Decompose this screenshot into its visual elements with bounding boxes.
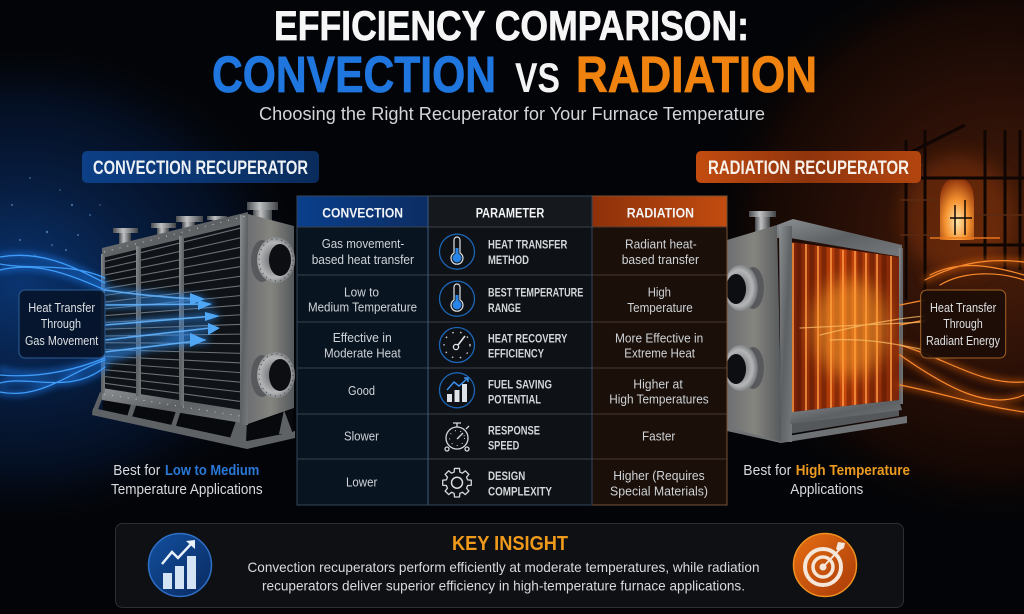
upper flange: [251, 237, 295, 283]
row: heat transfer method: [312, 236, 700, 267]
callout: heat transfer through gas movement: Heat Transfer: [28, 300, 96, 315]
row: heat transfer method: based transfer: [622, 252, 700, 267]
row: heat transfer method: HEAT TRANSFER: [488, 238, 568, 252]
row: design complexity: DESIGN: [488, 469, 525, 483]
row: best temperature range: Low to: [344, 285, 379, 300]
row: heat recovery efficiency: HEAT RECOVERY: [488, 332, 567, 346]
illustration: convection recuperator: [92, 202, 295, 449]
icon: rising bar chart: [440, 373, 474, 408]
row: response speed: Faster: [642, 429, 676, 444]
icon: target badge: [794, 534, 856, 596]
caption: radiation best use: Best for: [743, 463, 791, 479]
callout: heat transfer through radiant energy: [921, 290, 1006, 358]
lower flange: [724, 345, 764, 391]
caption: convection best use: Best for: [113, 463, 160, 479]
callout: heat transfer through gas movement: Gas Movement: [25, 333, 99, 348]
icon: stopwatch: [445, 423, 469, 451]
row: heat recovery efficiency: [324, 330, 703, 361]
row: heat recovery efficiency: Moderate Heat: [324, 346, 401, 361]
row: heat recovery efficiency: Effective in: [333, 330, 392, 345]
badge: convection recuperator: [82, 151, 319, 183]
row: heat recovery efficiency: Extreme Heat: [624, 346, 695, 361]
front rims: [779, 226, 903, 442]
row: response speed: [344, 423, 676, 452]
table backgrounds: [297, 196, 727, 505]
row: best temperature range: [308, 285, 693, 315]
row: design complexity: [346, 468, 708, 498]
caption: convection best use: Low to Medium: [165, 463, 259, 479]
upper flange: [724, 265, 764, 311]
insight text: Convection recuperators perform efficiently at moderate temperatures, while radiation: [248, 559, 760, 575]
front fin block: [102, 217, 248, 412]
callout: heat transfer through gas movement: Through: [41, 316, 81, 331]
callout: heat transfer through gas movement: [19, 290, 105, 358]
row: design complexity: Higher (Requires: [613, 468, 705, 483]
row: fuel saving potential: POTENTIAL: [488, 392, 541, 406]
core glow: [812, 278, 888, 378]
row: response speed: SPEED: [488, 438, 520, 452]
caption: radiation best use: High Temperature: [796, 463, 910, 479]
badge: convection recuperator: CONVECTION RECUPERATOR: [93, 158, 308, 179]
top pipes: [113, 202, 278, 254]
heading: key insight: KEY INSIGHT: [452, 533, 568, 555]
row: heat recovery efficiency: EFFICIENCY: [488, 347, 544, 361]
top frame: [777, 219, 902, 257]
row: fuel saving potential: FUEL SAVING: [488, 377, 552, 391]
gas flow streams: [0, 255, 220, 393]
row: fuel saving potential: Higher at: [633, 376, 683, 391]
title: [212, 2, 817, 103]
title: EFFICIENCY COMPARISON:: [274, 2, 749, 49]
side plate: [248, 214, 294, 424]
title: CONVECTION: [212, 46, 496, 103]
caption: convection best use: [111, 463, 263, 498]
icon: thermometer range: [440, 281, 474, 316]
row: fuel saving potential: Good: [348, 383, 375, 398]
heat fins: [104, 227, 246, 402]
badge: radiation recuperator: RADIATION RECUPERATOR: [708, 158, 909, 179]
row: heat transfer method: METHOD: [488, 253, 529, 267]
caption: convection best use: Temperature Applications: [111, 482, 263, 498]
row: response speed: Slower: [344, 429, 380, 444]
title: VS: [515, 54, 560, 101]
row: heat transfer method: Radiant heat-: [625, 236, 697, 252]
column header: parameter: PARAMETER: [476, 206, 544, 220]
icon: thermometer: [440, 234, 474, 269]
row: best temperature range: Temperature: [627, 300, 693, 315]
radiant energy streams: [800, 261, 1024, 412]
row: design complexity: COMPLEXITY: [488, 484, 552, 498]
row: response speed: RESPONSE: [488, 423, 540, 437]
subtitle: Choosing the Right Recuperator for Your Furnace Temperature: [259, 103, 765, 124]
callout: heat transfer through radiant energy: Through: [943, 316, 983, 331]
top pipe: [749, 211, 776, 232]
icon: gauge: [440, 328, 474, 362]
callout: heat transfer through radiant energy: Heat Transfer: [930, 300, 997, 315]
background: furnace plant silhouette: [900, 125, 1024, 300]
row: fuel saving potential: [348, 376, 709, 406]
column header: convection: CONVECTION: [322, 204, 403, 220]
panel: key insight: [116, 524, 904, 608]
icon: growth chart badge: [148, 534, 212, 596]
row: design complexity: Lower: [346, 475, 378, 490]
row: heat recovery efficiency: More Effective in: [615, 330, 703, 345]
row: fuel saving potential: High Temperatures: [609, 391, 709, 406]
rivets: [104, 216, 246, 417]
row: best temperature range: Medium Temperature: [308, 300, 417, 315]
icon: gear: [443, 468, 471, 497]
row: best temperature range: BEST TEMPERATURE: [488, 286, 583, 300]
title: RADIATION: [576, 46, 817, 103]
column header: radiation: RADIATION: [627, 204, 694, 220]
frame posts and rails: [101, 212, 248, 425]
badge: radiation recuperator: [696, 151, 921, 183]
background: particles: [11, 177, 101, 256]
base frame: [92, 392, 295, 449]
comparison table: [297, 196, 727, 505]
side plate: [727, 225, 782, 442]
row: heat transfer method: Gas movement-: [322, 236, 404, 251]
illustration: radiation recuperator: [724, 211, 907, 443]
callout: heat transfer through radiant energy: Radiant Energy: [926, 333, 1000, 348]
caption: radiation best use: [743, 463, 910, 498]
caption: radiation best use: Applications: [790, 482, 863, 498]
lower flange: [251, 352, 295, 398]
row: heat transfer method: based heat transfer: [312, 252, 415, 267]
base frame: [727, 406, 907, 443]
insight text: [248, 559, 760, 594]
insight text: recuperators deliver superior efficiency in high-temperature furnace applications.: [262, 578, 745, 594]
row: best temperature range: RANGE: [488, 301, 521, 315]
row: best temperature range: High: [648, 285, 671, 300]
glowing radiant core: [792, 242, 899, 412]
radiant tube dividers: [793, 243, 891, 412]
row: design complexity: Special Materials): [610, 483, 708, 498]
